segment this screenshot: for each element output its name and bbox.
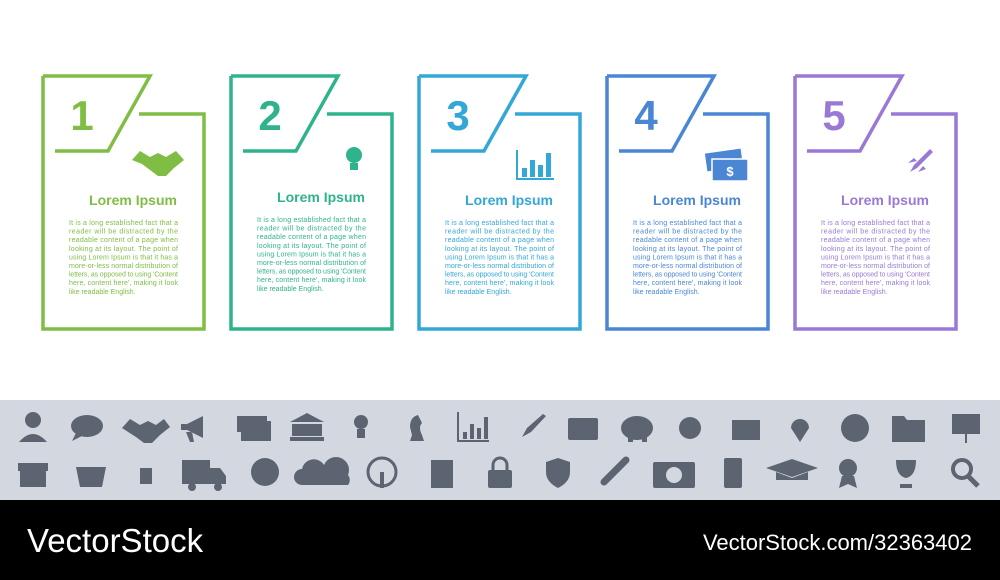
card 1: 1 [70, 92, 94, 139]
footer: VectorStock.com/32363402 [703, 530, 972, 555]
icon: bulb [346, 147, 362, 170]
footer [0, 500, 1000, 580]
icon strip [0, 400, 1000, 500]
card 4: Lorem Ipsum [653, 192, 741, 208]
icon: bar chart [516, 150, 554, 180]
card 2 [231, 76, 392, 329]
icon: money [705, 149, 748, 181]
card 5 [795, 76, 956, 329]
card 3: 3 [446, 92, 470, 139]
footer: VectorStock [27, 522, 204, 559]
card 4: 4 [634, 92, 658, 139]
card 5: Lorem Ipsum [841, 192, 929, 208]
row 1 [25, 412, 41, 428]
icon: money: $ [726, 164, 734, 179]
icon: rocket [908, 149, 933, 172]
card 3: Lorem Ipsum [465, 192, 553, 208]
card 2: Lorem Ipsum [277, 189, 365, 205]
card 4 [607, 76, 768, 329]
card 1: Lorem Ipsum [89, 192, 177, 208]
icon: handshake [132, 151, 184, 176]
card 2: 2 [258, 92, 282, 139]
card 5: 5 [822, 92, 846, 139]
card 3 [419, 76, 580, 329]
card 1 [43, 76, 204, 329]
row 2 [18, 463, 48, 471]
